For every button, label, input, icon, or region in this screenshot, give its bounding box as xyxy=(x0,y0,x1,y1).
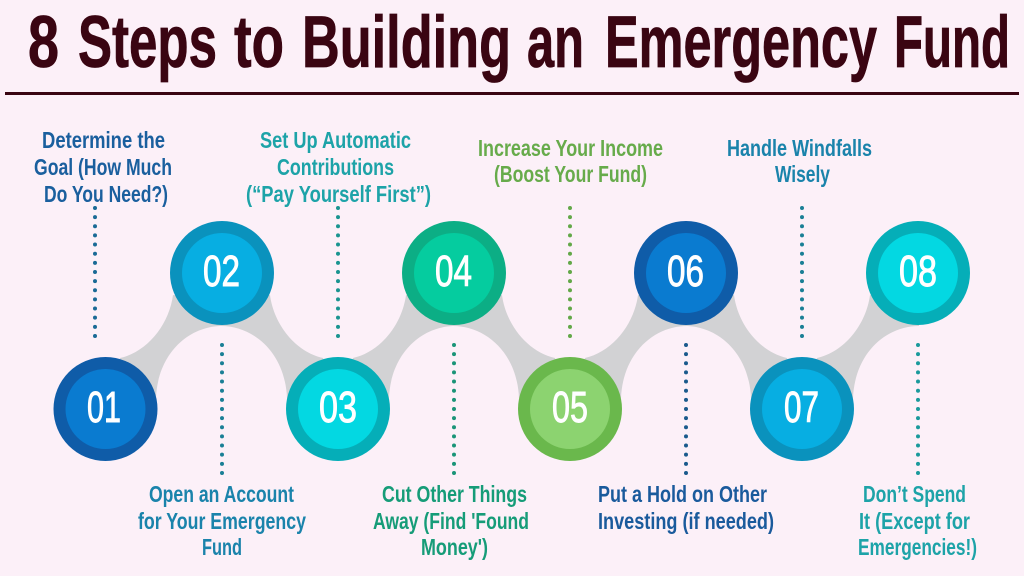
step 02 badge: 02 xyxy=(203,247,240,296)
step 04 badge xyxy=(402,221,506,325)
step 03 label: (“Pay Yourself First”) xyxy=(246,181,431,207)
step 07 label: Wisely xyxy=(775,161,830,187)
step 01 label: Do You Need?) xyxy=(44,181,168,207)
step 07 badge xyxy=(750,357,854,461)
step 05 label: (Boost Your Fund) xyxy=(494,161,647,187)
step 03 badge: 03 xyxy=(319,383,357,432)
step 02 dotted line xyxy=(220,345,224,475)
step 05 label: Increase Your Income xyxy=(478,135,663,161)
step 05 dotted line xyxy=(568,208,572,338)
step 03 xyxy=(246,127,431,461)
title: Emergency xyxy=(605,2,877,83)
step 01 label: Determine the xyxy=(42,127,165,153)
step 02 label: for Your Emergency xyxy=(138,508,306,534)
step 04 dotted line xyxy=(452,345,456,475)
step 02 label: Open an Account xyxy=(149,481,294,507)
step 01 badge: 01 xyxy=(87,383,121,432)
step 02 xyxy=(138,221,306,560)
step 08 label: Don’t Spend xyxy=(863,481,966,507)
step 04 xyxy=(373,221,529,560)
step 07 label: Handle Windfalls xyxy=(727,135,872,161)
title: 8 xyxy=(28,2,59,83)
step 04 label: Cut Other Things xyxy=(382,481,527,507)
step 05 badge xyxy=(518,357,622,461)
step 06 xyxy=(598,221,774,534)
step 03 badge xyxy=(286,357,390,461)
step 06 label xyxy=(598,481,774,534)
step 03 dotted line xyxy=(336,208,340,338)
step 06 dotted line xyxy=(684,345,688,475)
step 04 badge: 04 xyxy=(435,247,472,296)
step 03 label: Set Up Automatic xyxy=(260,127,411,153)
step 01 label xyxy=(34,127,172,207)
step 06 badge xyxy=(634,221,738,325)
title: Building xyxy=(302,2,511,83)
connector ribbon xyxy=(105,295,919,409)
step 02 badge xyxy=(170,221,274,325)
step 04 label: Away (Find 'Found xyxy=(373,508,529,534)
step 06 badge: 06 xyxy=(667,247,704,296)
title: to xyxy=(234,2,284,83)
step 07 xyxy=(727,135,872,461)
step 03 label xyxy=(246,127,431,207)
step 08 label: It (Except for xyxy=(859,508,970,534)
step 02 label xyxy=(138,481,306,560)
step 05 label xyxy=(478,135,663,187)
step 05 badge: 05 xyxy=(552,383,588,432)
step 01 label: Goal (How Much xyxy=(34,154,172,180)
step 03 label: Contributions xyxy=(277,154,394,180)
title xyxy=(28,2,1010,83)
step 08 dotted line xyxy=(916,345,920,475)
step 01 xyxy=(34,127,172,461)
step 02 label: Fund xyxy=(202,534,242,560)
step 01 badge xyxy=(54,357,158,461)
step 08 badge xyxy=(866,221,970,325)
step 06 label: Put a Hold on Other xyxy=(598,481,767,507)
step 08 badge: 08 xyxy=(899,247,937,296)
step 04 label: Money') xyxy=(421,534,488,560)
step 04 label xyxy=(373,481,529,560)
step 06 label: Investing (if needed) xyxy=(598,508,774,534)
step 08 xyxy=(858,221,977,560)
step 08 label: Emergencies!) xyxy=(858,534,977,560)
title: Steps xyxy=(78,2,217,83)
step 07 label xyxy=(727,135,872,187)
step 01 dotted line xyxy=(93,208,97,338)
step 07 dotted line xyxy=(800,208,804,338)
step 07 badge: 07 xyxy=(784,383,819,432)
step 05 xyxy=(478,135,663,461)
step 08 label xyxy=(858,481,977,560)
title: an xyxy=(527,2,584,83)
